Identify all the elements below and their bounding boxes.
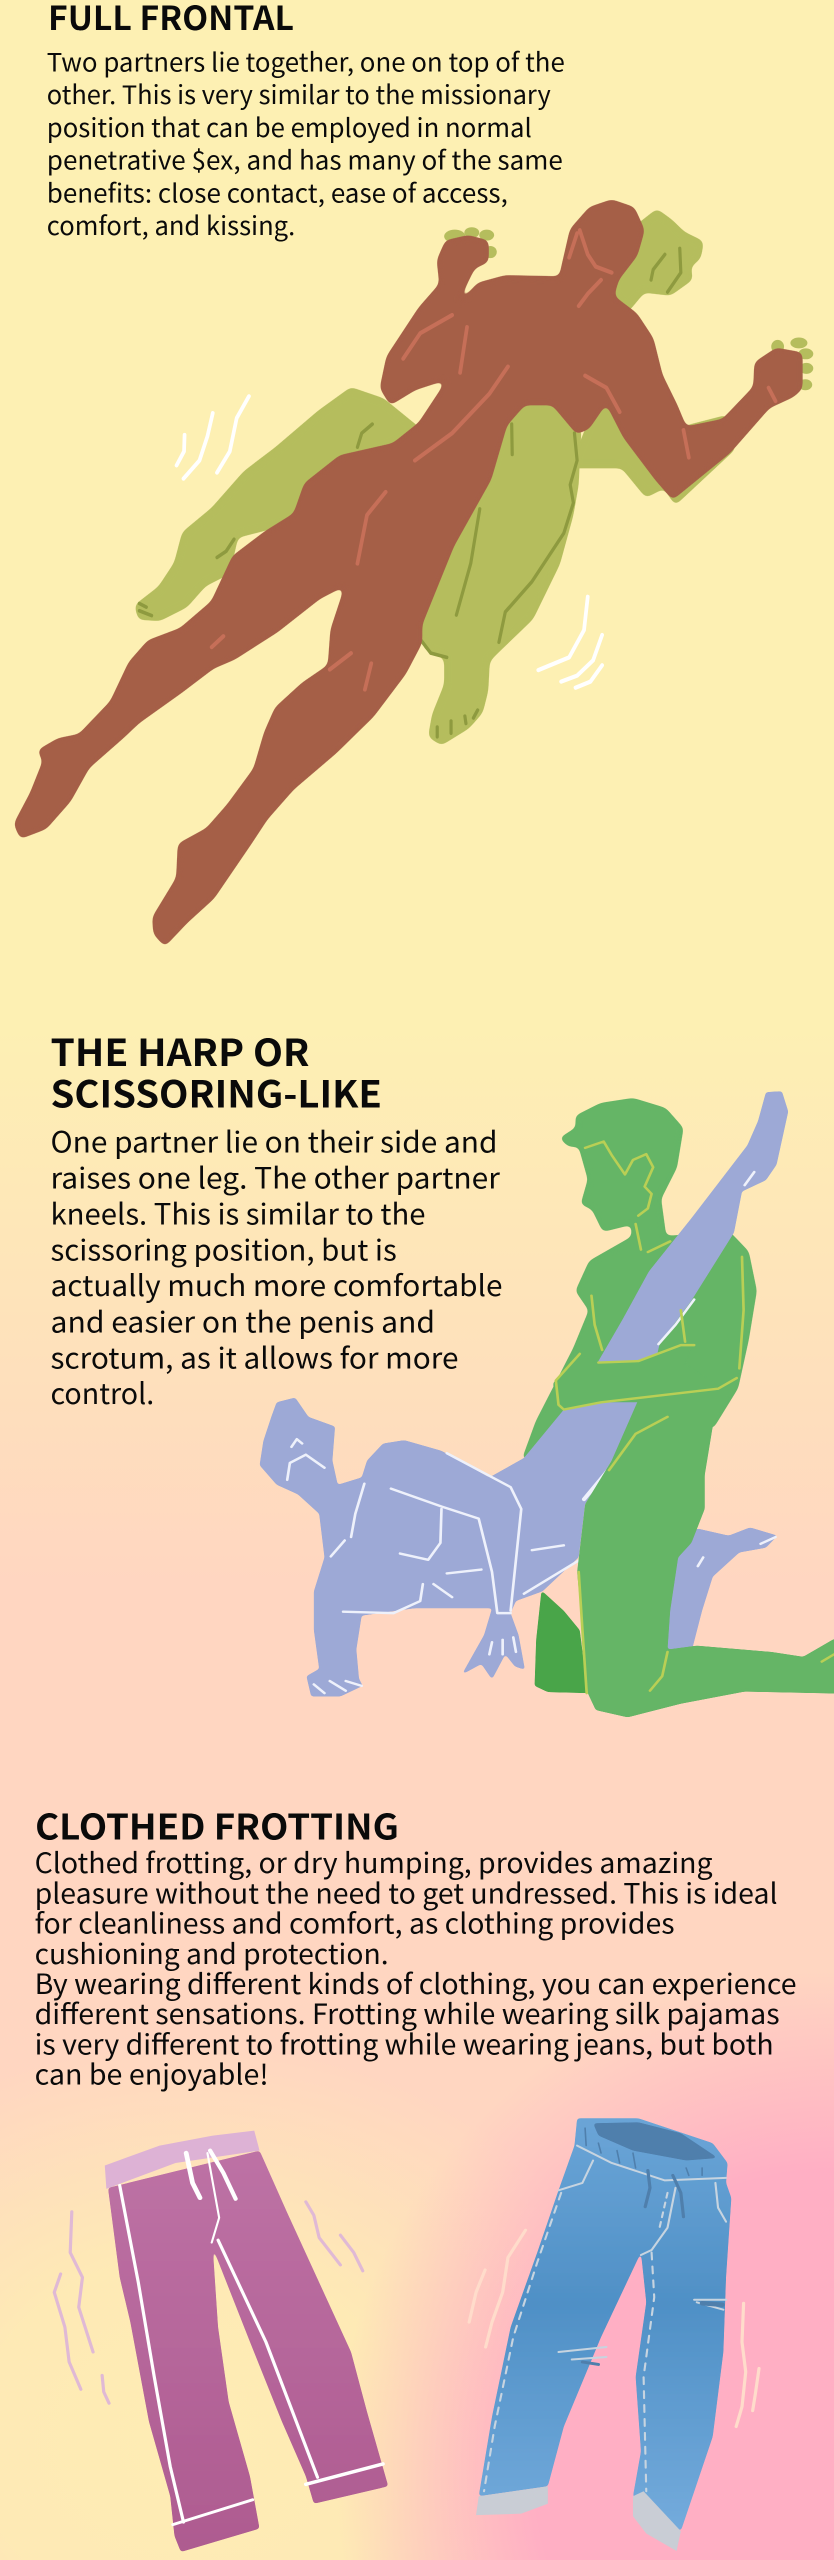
illustration: two partners lying together: [16, 202, 813, 943]
text block: frotting description: Clothed frotting, or dry humping, provides amazing: [35, 1842, 713, 1882]
text block: harp description: [50, 1120, 502, 1413]
green partner head and torso: [524, 1099, 755, 1458]
text block: full frontal description: benefits: close contact, ease of access,: [47, 173, 508, 210]
pajama piping and drawstrings: [120, 2151, 383, 2525]
text block: full frontal description: Two partners lie together, one on top of the: [47, 42, 565, 80]
figure: brown partner on top: [16, 202, 801, 943]
green partner far thigh: [535, 1590, 588, 1693]
motion lines: [177, 396, 602, 688]
green partner detail lines: [139, 248, 681, 737]
heading: clothed frotting: CLOTHED FROTTING: [35, 1800, 399, 1851]
text block: frotting description: for cleanliness and comfort, as clothing provides: [35, 1903, 675, 1943]
heading: the harp: THE HARP OR: [50, 1023, 310, 1077]
green partner hair lines: [585, 1142, 744, 1368]
jeans stitching and pockets: [484, 2146, 726, 2491]
pajama waistband: [105, 2131, 260, 2189]
green partner arm: [553, 1344, 723, 1410]
text block: frotting description: can be enjoyable!: [35, 2053, 269, 2093]
pajama motion lines: [54, 2202, 363, 2403]
jeans motion lines: [469, 2230, 759, 2427]
green partner body lines: [556, 1310, 834, 1693]
illustration: kneeling and side-lying partners: [260, 1091, 834, 1717]
text block: frotting description: is very different to frotting while wearing jeans, but both: [35, 2024, 774, 2064]
heading: the harp: SCISSORING-LIKE: [50, 1065, 382, 1119]
text block: frotting description: By wearing different kinds of clothing, you can experience: [35, 1963, 797, 2003]
text block: harp description: and easier on the penis and: [50, 1300, 435, 1342]
text block: frotting description: [35, 1842, 797, 2093]
text block: frotting description: pleasure without the need to get undressed. This is ideal: [35, 1872, 778, 1912]
text block: frotting description: cushioning and protection.: [35, 1933, 389, 1973]
green partner lower body: [577, 1383, 834, 1717]
blue partner detail lines: [287, 1172, 776, 1693]
text block: full frontal description: position that can be employed in normal: [47, 108, 532, 145]
figure: green partner underneath: [136, 211, 813, 743]
text block: harp description: raises one leg. The other partner: [50, 1156, 501, 1198]
text block: full frontal description: comfort, and kissing.: [47, 206, 295, 243]
blue partner body with raised leg: [260, 1091, 788, 1697]
jeans tears and drawstring: [582, 2128, 722, 2364]
pajama legs: [108, 2151, 388, 2552]
illustration: jeans: [469, 2118, 759, 2551]
text block: full frontal description: other. This is very similar to the missionary: [47, 75, 551, 112]
text block: harp description: scrotum, as it allows for more: [50, 1335, 458, 1377]
text block: harp description: scissoring position, but is: [50, 1228, 397, 1270]
panel: full frontal: [16, 0, 813, 943]
illustration: silk pajama pants: [54, 2131, 388, 2552]
text block: full frontal description: penetrative $ex, and has many of the same: [47, 141, 563, 178]
blue partner back leg: [660, 1527, 778, 1652]
brown partner detail lines: [212, 230, 776, 690]
text block: harp description: actually much more comfortable: [50, 1263, 502, 1305]
jeans legs and waist: [479, 2118, 731, 2531]
heading: the harp: [50, 1023, 382, 1119]
panel: clothed frotting: [35, 1800, 797, 2552]
jeans grey cuffs: [476, 2486, 681, 2551]
text block: harp description: kneels. This is similar to the: [50, 1192, 425, 1234]
text block: harp description: control.: [50, 1371, 154, 1413]
text block: harp description: One partner lie on their side and: [50, 1120, 498, 1162]
text block: frotting description: different sensations. Frotting while wearing silk pajamas: [35, 1993, 780, 2033]
panel: the harp or scissoring-like: [50, 1023, 834, 1717]
text block: full frontal description: [47, 42, 565, 243]
jeans inner waist: [593, 2122, 718, 2161]
